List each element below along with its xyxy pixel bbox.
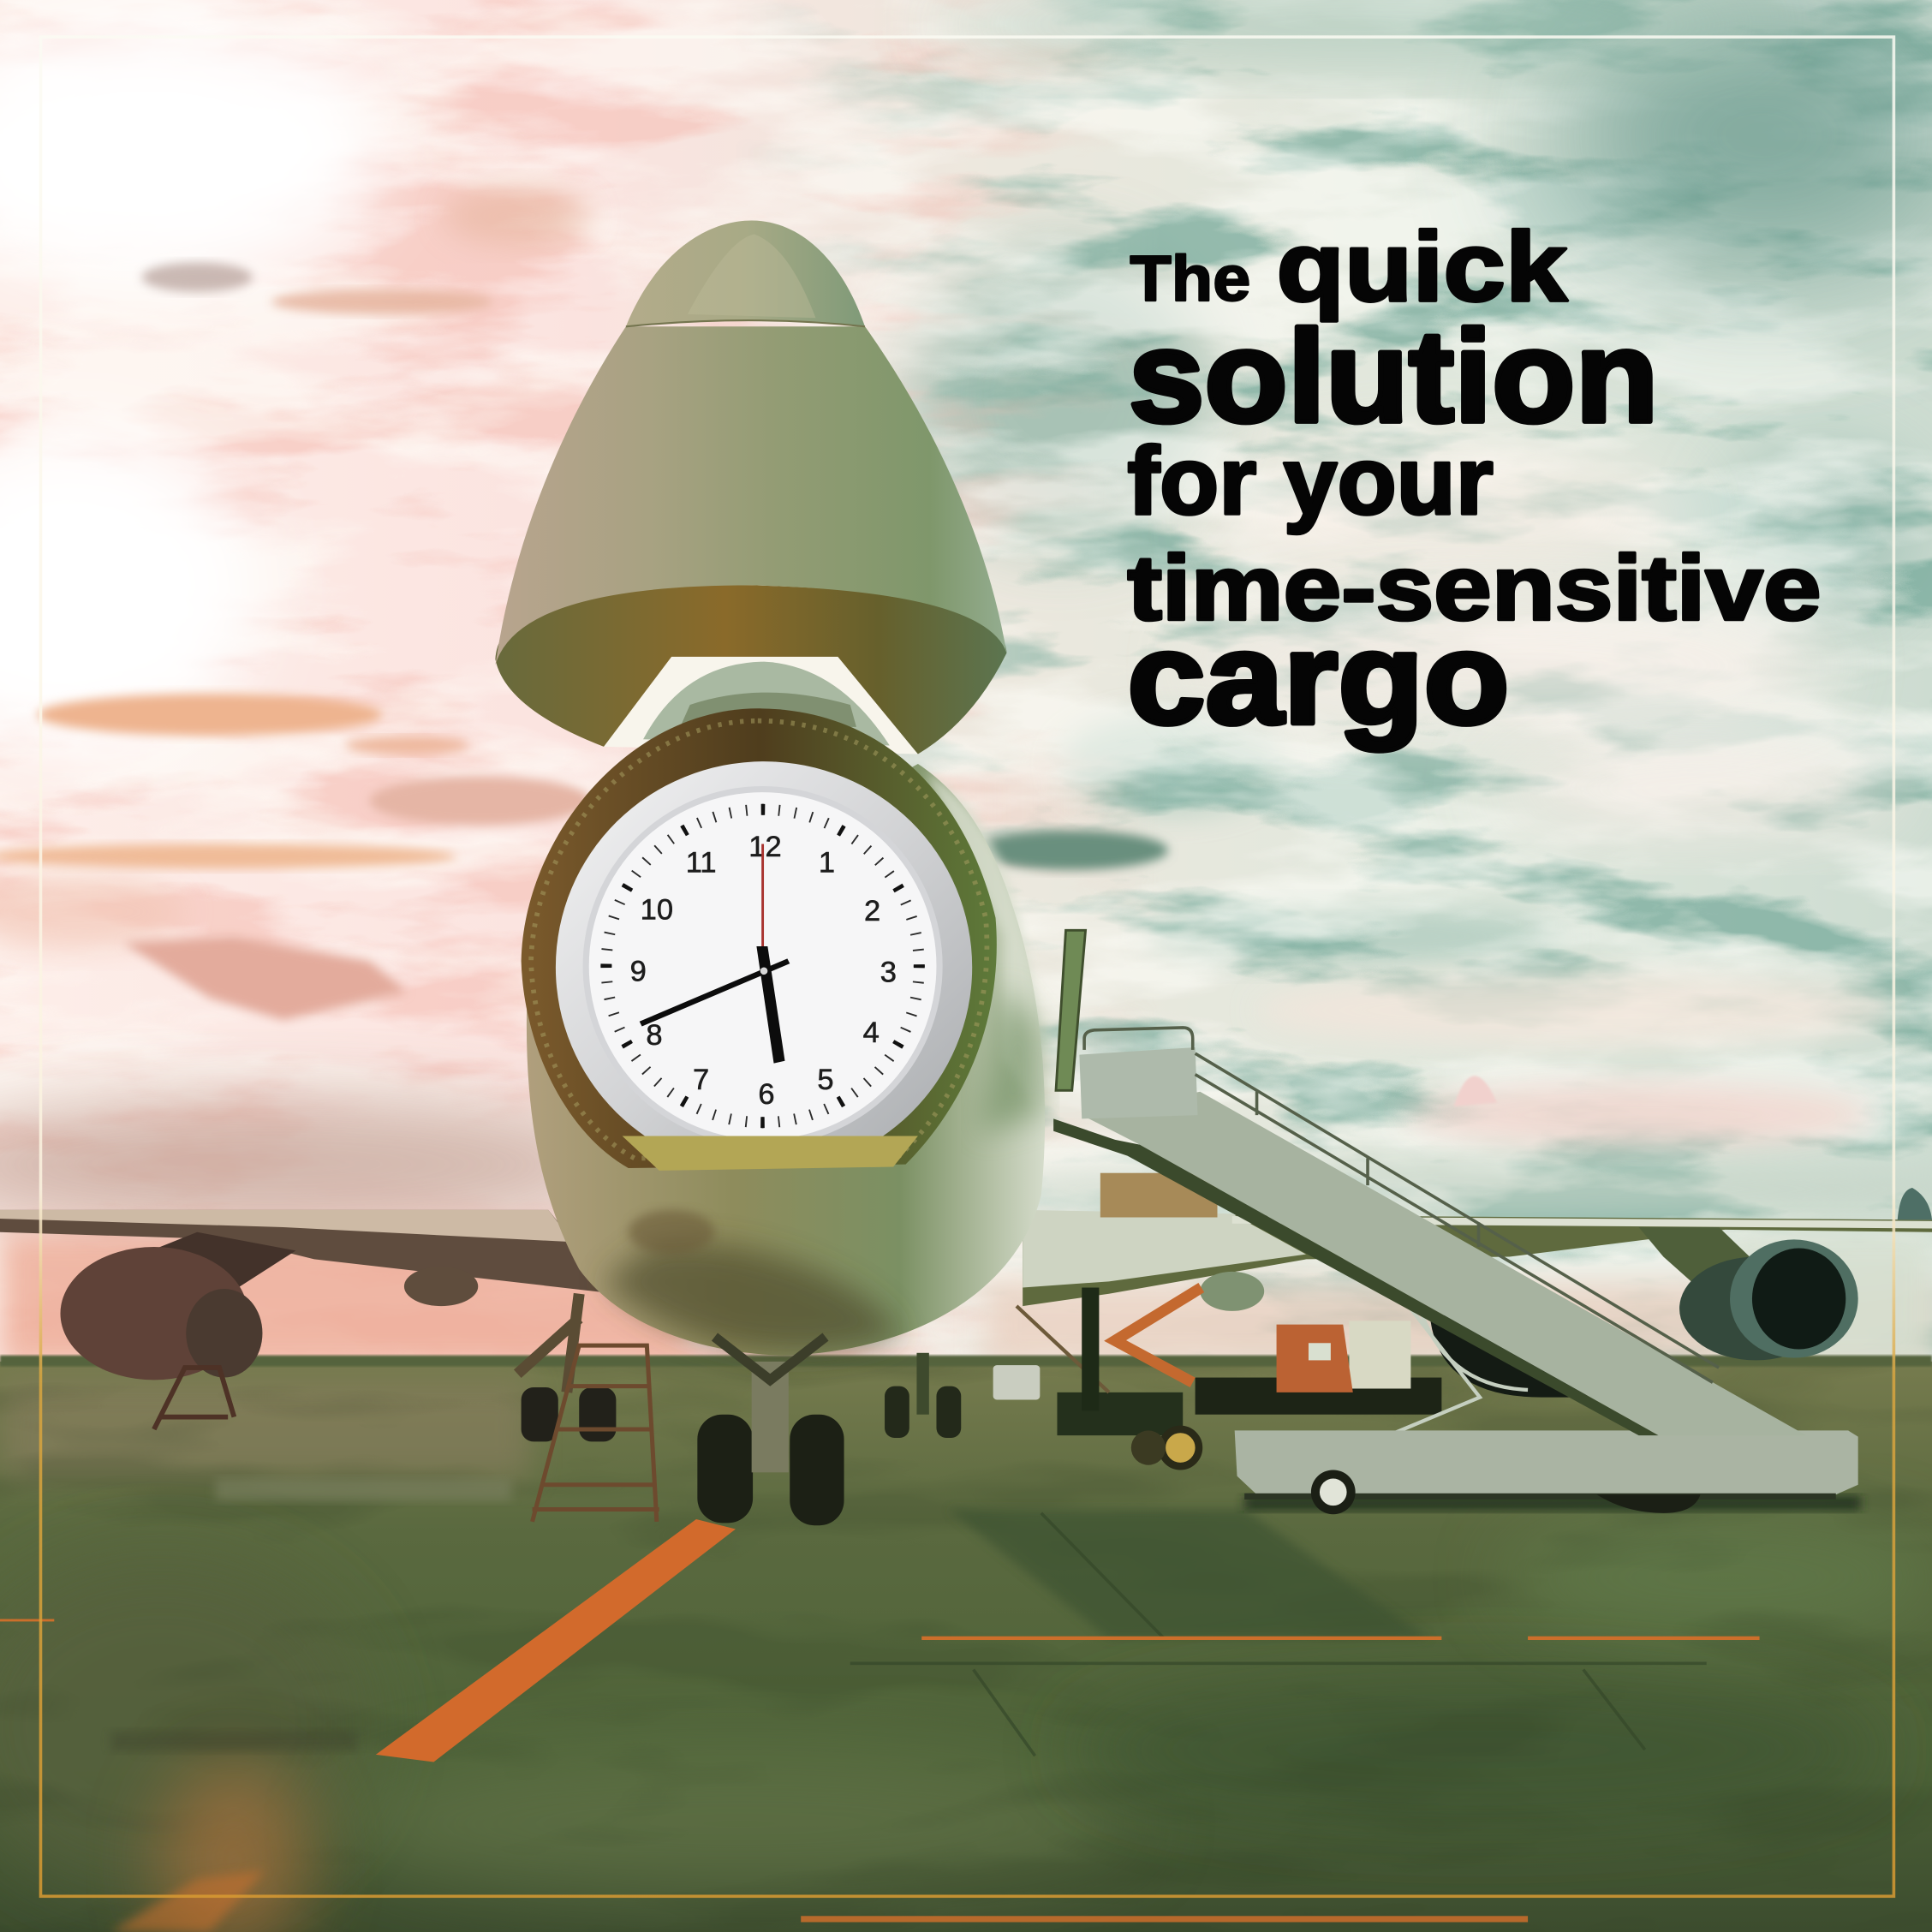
- fuel truck and vehicles: [993, 1321, 1441, 1466]
- cone tip crease: [688, 234, 815, 318]
- cone tip: [626, 221, 865, 326]
- headline line 4: time-sensitive: [1127, 536, 1822, 640]
- headline line 1: The: [1130, 242, 1250, 314]
- nose cone: [495, 221, 1006, 754]
- right engine: [1639, 1227, 1858, 1360]
- hour hand: [756, 946, 784, 1064]
- cone seam: [626, 320, 865, 326]
- clock numerals: 7: [693, 1064, 709, 1096]
- clock face: [589, 792, 936, 1140]
- cone interior: [495, 585, 1006, 754]
- clock bezel: [556, 761, 972, 1173]
- stair platform: [1079, 1047, 1197, 1118]
- boarding door: [1056, 930, 1086, 1090]
- clock numerals: 8: [646, 1019, 663, 1052]
- distant tree line: [0, 1356, 1932, 1367]
- clock numerals: 3: [880, 957, 897, 989]
- clock numerals: 12: [748, 831, 782, 863]
- stair base: [1235, 1430, 1858, 1514]
- headline line 5: cargo: [1127, 606, 1509, 752]
- nose landing gear: [697, 1337, 844, 1525]
- left wing: [0, 1210, 616, 1294]
- clock numerals: 10: [641, 893, 673, 926]
- ramp underside edge: [1053, 1118, 1659, 1435]
- clock numerals: 6: [758, 1078, 775, 1111]
- background terminal building: [1100, 1173, 1218, 1218]
- cockpit behind nose cone: [643, 662, 890, 745]
- cargo floor: [623, 1136, 918, 1171]
- fuselage green side patch: [980, 986, 1041, 1134]
- passenger stair truck: [1053, 1028, 1858, 1514]
- wall clock: [556, 761, 972, 1173]
- clock numerals: 9: [630, 955, 647, 987]
- main landing gear right: [885, 1288, 1202, 1438]
- clock inner rim: [583, 786, 943, 1146]
- cone shell: [495, 326, 1006, 665]
- headline line 3: for your: [1127, 426, 1494, 534]
- clock numerals: 11: [686, 847, 717, 880]
- clock numerals: 5: [817, 1064, 834, 1096]
- clock numerals: [630, 831, 897, 1111]
- maintenance ladder: [533, 1345, 659, 1522]
- fuselage right highlight: [927, 774, 1039, 1109]
- right wing: [1023, 1188, 1932, 1311]
- gap behind nose cone: [604, 657, 918, 754]
- orange runway stripe: [376, 1519, 736, 1762]
- tarmac ground: [0, 1362, 1932, 1932]
- clock numerals: 4: [863, 1017, 880, 1049]
- stair railing: [1084, 1028, 1719, 1382]
- minute ticks: [606, 809, 919, 1123]
- fuselage: [527, 764, 1045, 1356]
- left engine: [60, 1232, 478, 1429]
- clock numerals: 1: [819, 847, 835, 880]
- ring texture: [531, 721, 987, 1158]
- fuselage opening ring: [522, 708, 997, 1168]
- orange ground markings: [0, 1619, 1760, 1922]
- headline line 1: quick: [1277, 212, 1568, 322]
- main landing gear left: [517, 1294, 616, 1441]
- stair ramp: [1084, 1092, 1806, 1435]
- minute hand: [640, 958, 790, 1026]
- second hand: [762, 844, 764, 951]
- nose stain: [629, 1210, 714, 1255]
- headline line 2: solution: [1129, 304, 1659, 450]
- fuselage lower shading: [604, 1243, 899, 1352]
- clock numerals: 2: [864, 895, 880, 927]
- airplane: [0, 221, 1932, 1525]
- sky background: [0, 0, 1932, 1368]
- clock pivot: [760, 967, 767, 975]
- stair undercarriage: [1389, 1297, 1589, 1435]
- hour ticks: [606, 809, 919, 1123]
- headline: [1127, 212, 1822, 752]
